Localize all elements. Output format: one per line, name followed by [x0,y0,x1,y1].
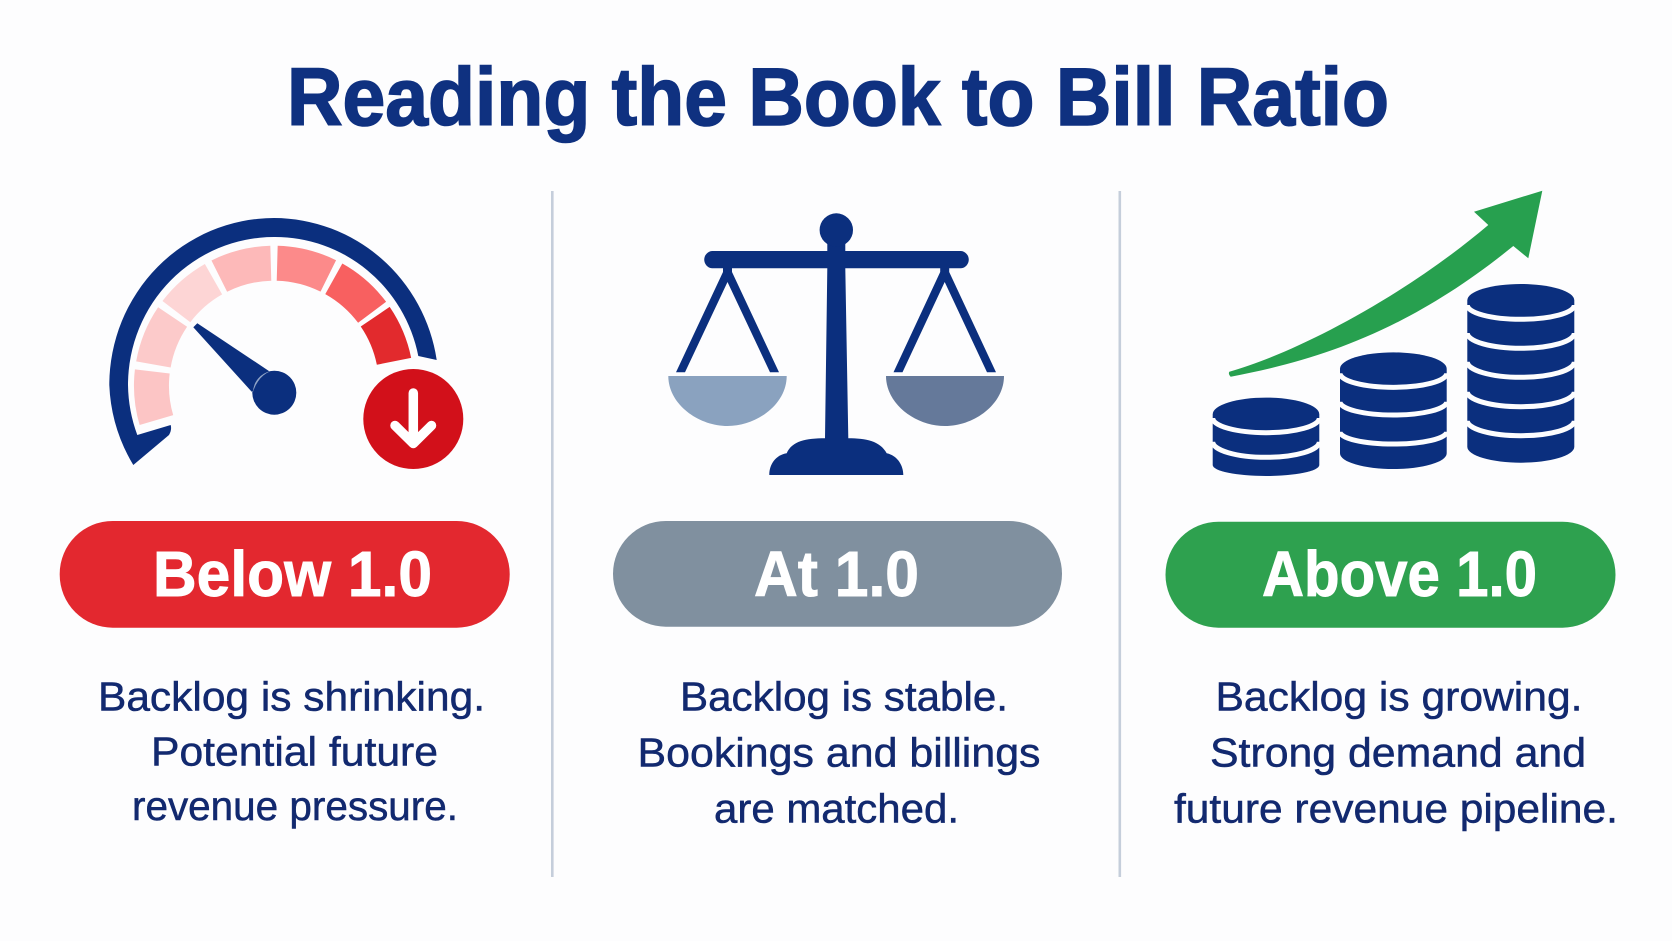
text: below 1.0 description [98,674,485,829]
icon: balance scale [668,213,1004,475]
text: below 1.0 description: Potential future [151,729,438,775]
text: at 1.0 description: Backlog is stable. [680,674,1008,720]
text: above 1.0 description: Strong demand and [1210,730,1586,776]
text: above 1.0 description: future revenue pipeline. [1174,786,1618,832]
panel: at 1.0 [613,213,1062,832]
panel: above 1.0 [1166,191,1618,832]
coin stack: tall [1467,284,1574,463]
gauge segments [151,263,394,420]
green rising arrow [1229,191,1542,377]
title: Reading the Book to Bill Ratio [287,52,1389,143]
panel: below 1.0 [60,218,510,829]
right hanger and pan [886,268,1004,426]
pill: below 1.0: Below 1.0 [153,538,432,610]
pill: below 1.0 [60,521,510,628]
text: below 1.0 description: revenue pressure. [132,783,458,829]
text: above 1.0 description [1174,674,1618,832]
pill: at 1.0 [613,521,1062,627]
text: above 1.0 description: Backlog is growing. [1216,674,1582,720]
icon: speedometer gauge with down arrow [109,218,463,469]
pill: above 1.0: Above 1.0 [1262,538,1537,610]
scale post, beam and base [704,240,969,475]
text: at 1.0 description: Bookings and billings [638,730,1040,776]
coin stack: medium [1340,352,1447,469]
text: at 1.0 description: are matched. [714,786,959,832]
pill: at 1.0: At 1.0 [754,538,919,610]
text: below 1.0 description: Backlog is shrinking. [98,674,485,720]
pill: above 1.0 [1166,522,1616,628]
icon: rising coin stacks with arrow [1213,191,1574,476]
coin stack: small [1213,398,1319,476]
left hanger and pan [668,268,787,426]
text: at 1.0 description [638,674,1040,832]
gauge outer arc [109,218,437,465]
red down-arrow badge [363,369,463,469]
gauge needle [193,323,296,415]
